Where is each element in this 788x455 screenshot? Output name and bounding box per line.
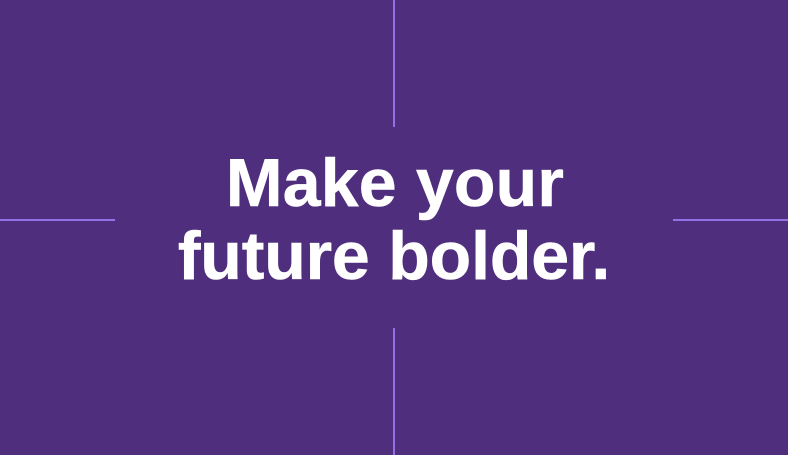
headline line 2: future bolder. [178, 218, 610, 294]
headline [178, 145, 610, 294]
crosshair line: bottom [393, 328, 395, 455]
crosshair line: top [393, 0, 395, 127]
crosshair line: right [673, 219, 788, 221]
headline line 1: Make your [226, 145, 564, 221]
crosshair line: left [0, 219, 115, 221]
